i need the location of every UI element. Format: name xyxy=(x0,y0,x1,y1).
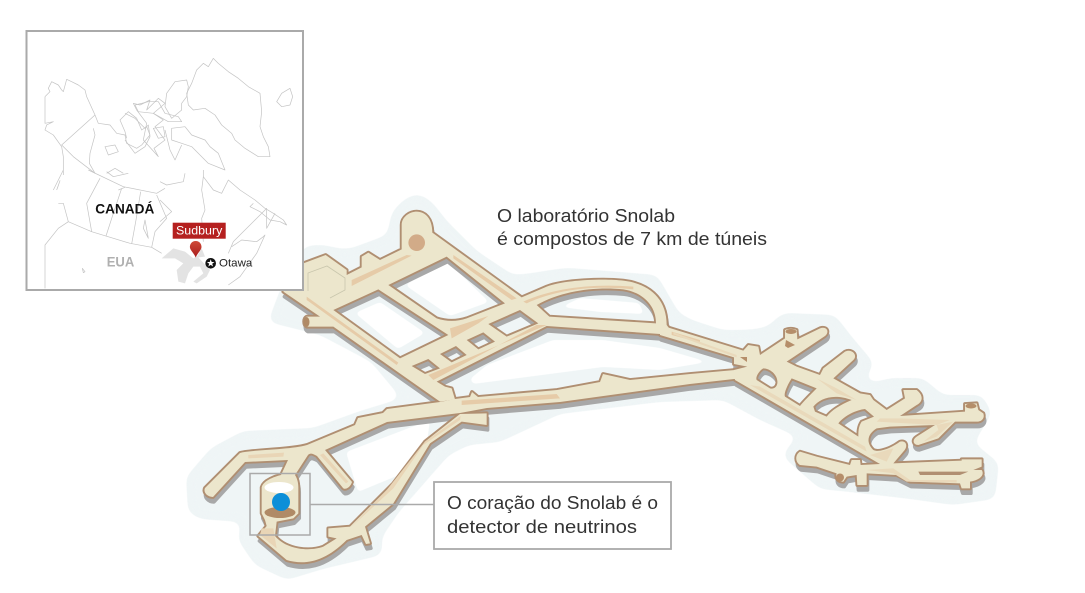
heading text: Snolab tunnels: é compostos de 7 km de túneis xyxy=(497,229,767,249)
blue neutrino detector sphere xyxy=(272,493,290,511)
white gaps inside the halo xyxy=(346,261,708,492)
map: Greenland, Iceland and Arctic islands xyxy=(125,58,293,170)
map: north-west outlines, Alaska and Yukon xyxy=(45,79,165,175)
halo: pale blue surrounding the tunnels xyxy=(186,194,999,580)
tunnel highlights, right side xyxy=(673,332,957,483)
tunnel highlights, lower left xyxy=(248,416,461,548)
panel: location map inset xyxy=(26,31,303,290)
map marker: Otawa capital star xyxy=(205,258,216,269)
map pin: Sudbury xyxy=(190,241,202,258)
callout: detector: detector de neutrinos xyxy=(447,517,637,537)
tunnel floor xyxy=(204,212,984,562)
tunnel network xyxy=(204,212,985,567)
map label: Otawa: Otawa xyxy=(219,258,253,270)
detector cavern xyxy=(264,482,296,518)
map label: EUA: EUA xyxy=(107,254,134,270)
brown caps and details on the right side xyxy=(740,329,976,482)
brown base of the cavern xyxy=(264,507,296,518)
map label: Sudbury: Sudbury xyxy=(176,224,222,238)
callout: detector: O coração do Snolab é o xyxy=(447,493,658,513)
brown round chamber at the top of the network xyxy=(408,234,425,251)
tunnel outline xyxy=(204,212,984,562)
map: Great Lakes xyxy=(162,248,210,283)
highlight box around detector xyxy=(250,474,310,535)
heading text: Snolab tunnels: O laboratório Snolab xyxy=(497,206,675,226)
white top of the cavern xyxy=(264,482,294,493)
thin outline inside the upper block xyxy=(308,266,345,298)
tunnel highlights, upper network xyxy=(307,255,700,405)
callout leader line xyxy=(310,504,434,506)
heading text: Snolab tunnels xyxy=(497,206,767,249)
callout: detector xyxy=(434,482,671,549)
map label: CANADÁ: CANADÁ xyxy=(95,200,154,216)
map: prairie provinces and US border xyxy=(45,170,167,288)
tunnel shadow xyxy=(205,217,985,567)
map: Ontario, Quebec and Atlantic coast xyxy=(160,170,287,285)
brown cap of the left stub xyxy=(304,317,310,327)
